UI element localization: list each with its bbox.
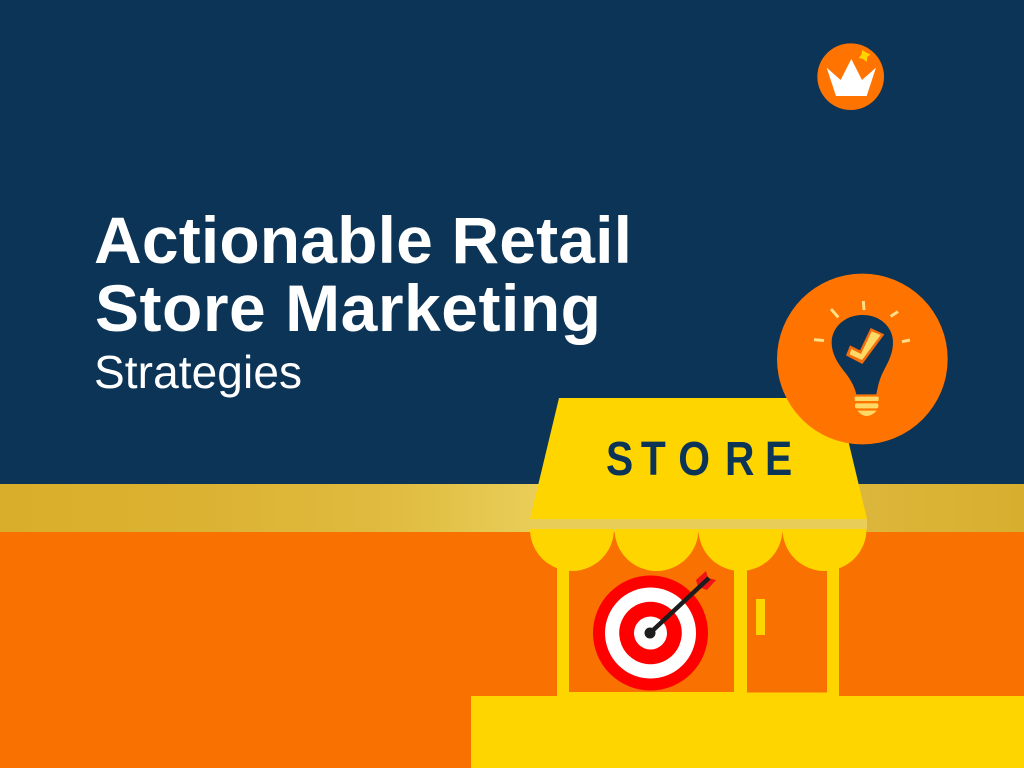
check mark bbox=[846, 328, 884, 364]
orange lower background bbox=[0, 532, 1024, 768]
navy background bbox=[0, 0, 1024, 485]
awning roof bbox=[530, 398, 867, 519]
icon: target with arrow bbox=[593, 571, 716, 690]
icon: crown logo bbox=[817, 43, 884, 110]
title: Actionable Retail bbox=[94, 203, 632, 277]
awning gold strip bbox=[530, 519, 867, 529]
bulb glass bbox=[832, 315, 893, 394]
store sign text: STORE bbox=[606, 433, 792, 486]
bulb screw base bbox=[855, 397, 879, 416]
door handle bbox=[756, 599, 765, 635]
subtitle: Strategies bbox=[94, 346, 302, 398]
light rays bbox=[814, 301, 910, 342]
gold ribbon band bbox=[0, 484, 1024, 532]
store illustration bbox=[471, 398, 1024, 768]
store front frame bbox=[557, 560, 839, 697]
icon: light bulb badge bbox=[777, 274, 948, 444]
title bbox=[94, 203, 632, 345]
title: Store Marketing bbox=[95, 271, 601, 345]
store base bbox=[471, 696, 1024, 768]
awning scallops bbox=[530, 529, 866, 571]
